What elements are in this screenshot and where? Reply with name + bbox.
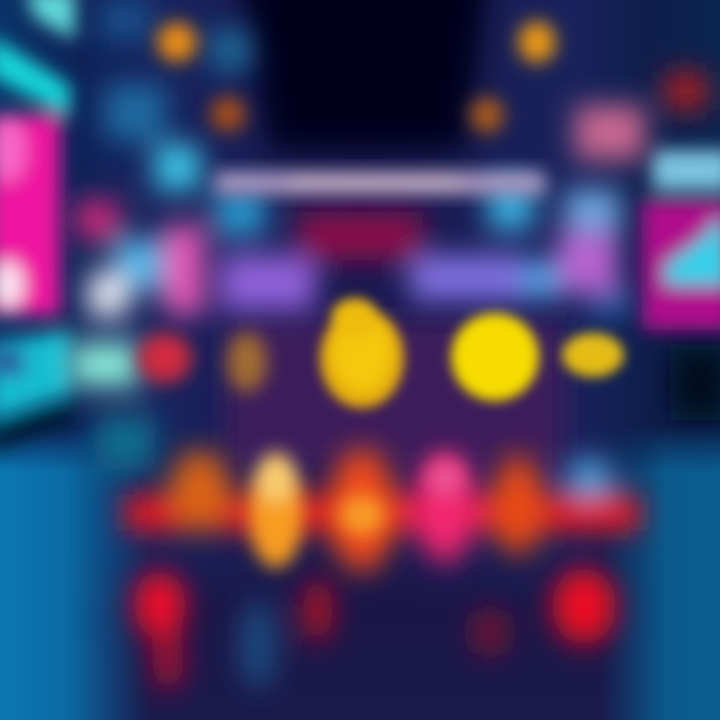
highlight: pink top: [425, 458, 465, 498]
coin: round yellow: [451, 313, 539, 401]
sign: blue square in lower panel: [0, 350, 23, 375]
glow: pink column: [415, 453, 475, 563]
band: red line: [125, 495, 640, 531]
coin: bitcoin symbol: [320, 298, 404, 408]
sign: pale corner stripe: [25, 0, 75, 40]
sign: cyan lower panel: [0, 330, 72, 420]
sign: cyan top stripe: [0, 35, 70, 118]
light: upper left: [157, 22, 197, 62]
left wall neon signs: [0, 0, 75, 452]
sign: white glow in magenta panel: [0, 261, 24, 309]
highlight: yellow column: [248, 452, 304, 568]
light: left: [134, 571, 186, 639]
top orange lights: [157, 21, 556, 133]
light: upper right: [518, 21, 556, 63]
glow: orange right: [492, 455, 544, 555]
highlight: pale top: [256, 454, 296, 502]
sign: magenta panel: [0, 115, 60, 315]
highlight: centre column: [340, 495, 384, 535]
coin: small oval: [562, 333, 624, 377]
light: right: [552, 568, 616, 644]
glow: blue top right: [566, 456, 614, 500]
hot column highlights: [248, 452, 465, 568]
glow: orange left: [170, 450, 230, 530]
sign: dark base: [0, 400, 72, 452]
light: floor blue: [240, 600, 276, 690]
background: soft depth shapes: [225, 0, 720, 470]
bright horizontal banner: [215, 172, 545, 194]
mid-row markers: [138, 332, 267, 392]
light: left tail: [152, 630, 184, 690]
lower red lights: [134, 568, 616, 690]
sign: cyan cloud shape: [665, 215, 720, 285]
light: centre: [303, 578, 333, 642]
sign: magenta panel: [642, 200, 720, 330]
red glowing row: [125, 448, 640, 572]
sign: light pink highlight: [0, 118, 26, 182]
sign: pale blue top panel: [652, 150, 720, 190]
light: centre right: [473, 608, 507, 656]
marker: amber dome: [227, 332, 267, 392]
mid-wall tiles: [70, 0, 707, 470]
light: inner right: [470, 97, 504, 133]
right wall neon signs: [642, 150, 720, 330]
glow: orange column: [328, 448, 396, 572]
gold coins: [320, 298, 624, 408]
marker: red diamond: [138, 333, 192, 383]
light: inner left: [210, 96, 246, 132]
